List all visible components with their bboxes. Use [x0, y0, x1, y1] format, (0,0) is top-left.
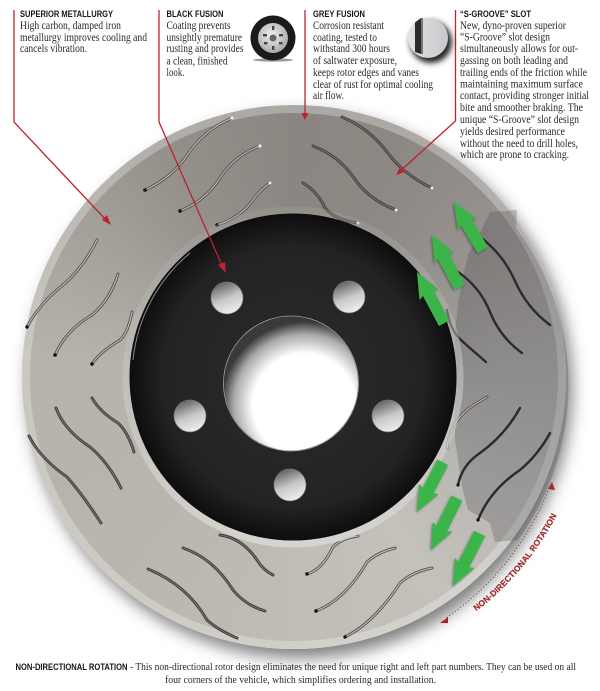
text: grey fusion: coating, tested to: [313, 32, 377, 44]
text: grey fusion: Corrosion resistant: [313, 20, 385, 32]
text: non-directional rotation footer: [16, 662, 576, 686]
text: black fusion: rusting and provides: [166, 43, 244, 55]
text: s-groove slot: maintaining maximum surface: [460, 78, 583, 90]
text: s-groove slot: New, dyno-proven superior: [460, 20, 566, 32]
text: superior metallurgy: metallurgy improves cooling and: [20, 32, 147, 44]
text: grey fusion: keeps rotor edges and vanes: [313, 67, 419, 79]
text: s-groove slot: unique “S-Groove” slot design: [460, 114, 579, 126]
black hat section: [130, 214, 456, 540]
text: black fusion: unsightly premature: [166, 32, 242, 44]
text: superior metallurgy: SUPERIOR METALLURGY: [20, 9, 113, 20]
text: grey fusion: withstand 300 hours: [313, 43, 390, 55]
text: s-groove slot: yields desired performance: [460, 126, 565, 138]
text: superior metallurgy: [20, 9, 147, 55]
text: s-groove slot: “S-Groove” slot design: [460, 32, 550, 44]
text: s-groove slot: without the need to drill holes,: [460, 138, 578, 150]
bolt holes: [174, 281, 404, 501]
text: grey fusion: clear of rust for optimal cooling: [313, 79, 433, 91]
brake pad ghost: [455, 210, 569, 542]
text: s-groove slot: gassing on both leading and: [460, 55, 568, 67]
green arrows: downward: [407, 457, 490, 591]
rotor disc surface: [22, 105, 566, 649]
pointer: grey fusion: [302, 10, 308, 120]
text: grey fusion: [313, 9, 433, 102]
icon: coated rotor thumbnail: [408, 18, 452, 63]
text: s-groove slot: simultaneously allows for out-: [460, 43, 578, 55]
pointer: black fusion: [159, 10, 226, 273]
text: grey fusion: of saltwater exposure,: [313, 55, 397, 67]
text: grey fusion: GREY FUSION: [313, 9, 365, 20]
text: black fusion: Coating prevents: [166, 20, 231, 32]
non-directional rotation label: NON-DIRECTIONAL ROTATION: [473, 513, 557, 611]
text: non-directional rotation footer: four corners of the vehicle, which simplifies ordering and installation.: [165, 675, 436, 686]
hat edge highlight: [133, 253, 190, 360]
outer rim highlight: [26, 109, 562, 645]
text: grey fusion: air flow.: [313, 90, 344, 102]
non-directional rotation arrow: [440, 482, 555, 623]
text: black fusion: [166, 9, 244, 79]
pointer: superior metallurgy: [14, 10, 111, 225]
text: s-groove slot: which are prone to cracking.: [460, 149, 569, 161]
text: superior metallurgy: High carbon, damped iron: [20, 20, 121, 32]
pointer: s-groove slot: [396, 10, 456, 175]
icon: wheel thumbnail: [250, 16, 296, 62]
grooves: [27, 117, 550, 638]
groove end marks: [25, 116, 480, 639]
center hole: [224, 316, 358, 451]
text: non-directional rotation footer: NON-DIRECTIONAL ROTATION: [16, 662, 128, 673]
text: s-groove slot: [460, 9, 589, 161]
text: black fusion: look.: [166, 67, 185, 79]
text: black fusion: BLACK FUSION: [166, 9, 224, 20]
rotor hat ring: [126, 210, 460, 544]
green arrows: upward: [407, 196, 492, 328]
text: s-groove slot: “S-GROOVE” SLOT: [460, 9, 531, 20]
text: superior metallurgy: cancels vibration.: [20, 43, 87, 55]
text: black fusion: a clean, finished: [166, 56, 228, 68]
text: s-groove slot: bite and smoother braking. The: [460, 102, 583, 114]
